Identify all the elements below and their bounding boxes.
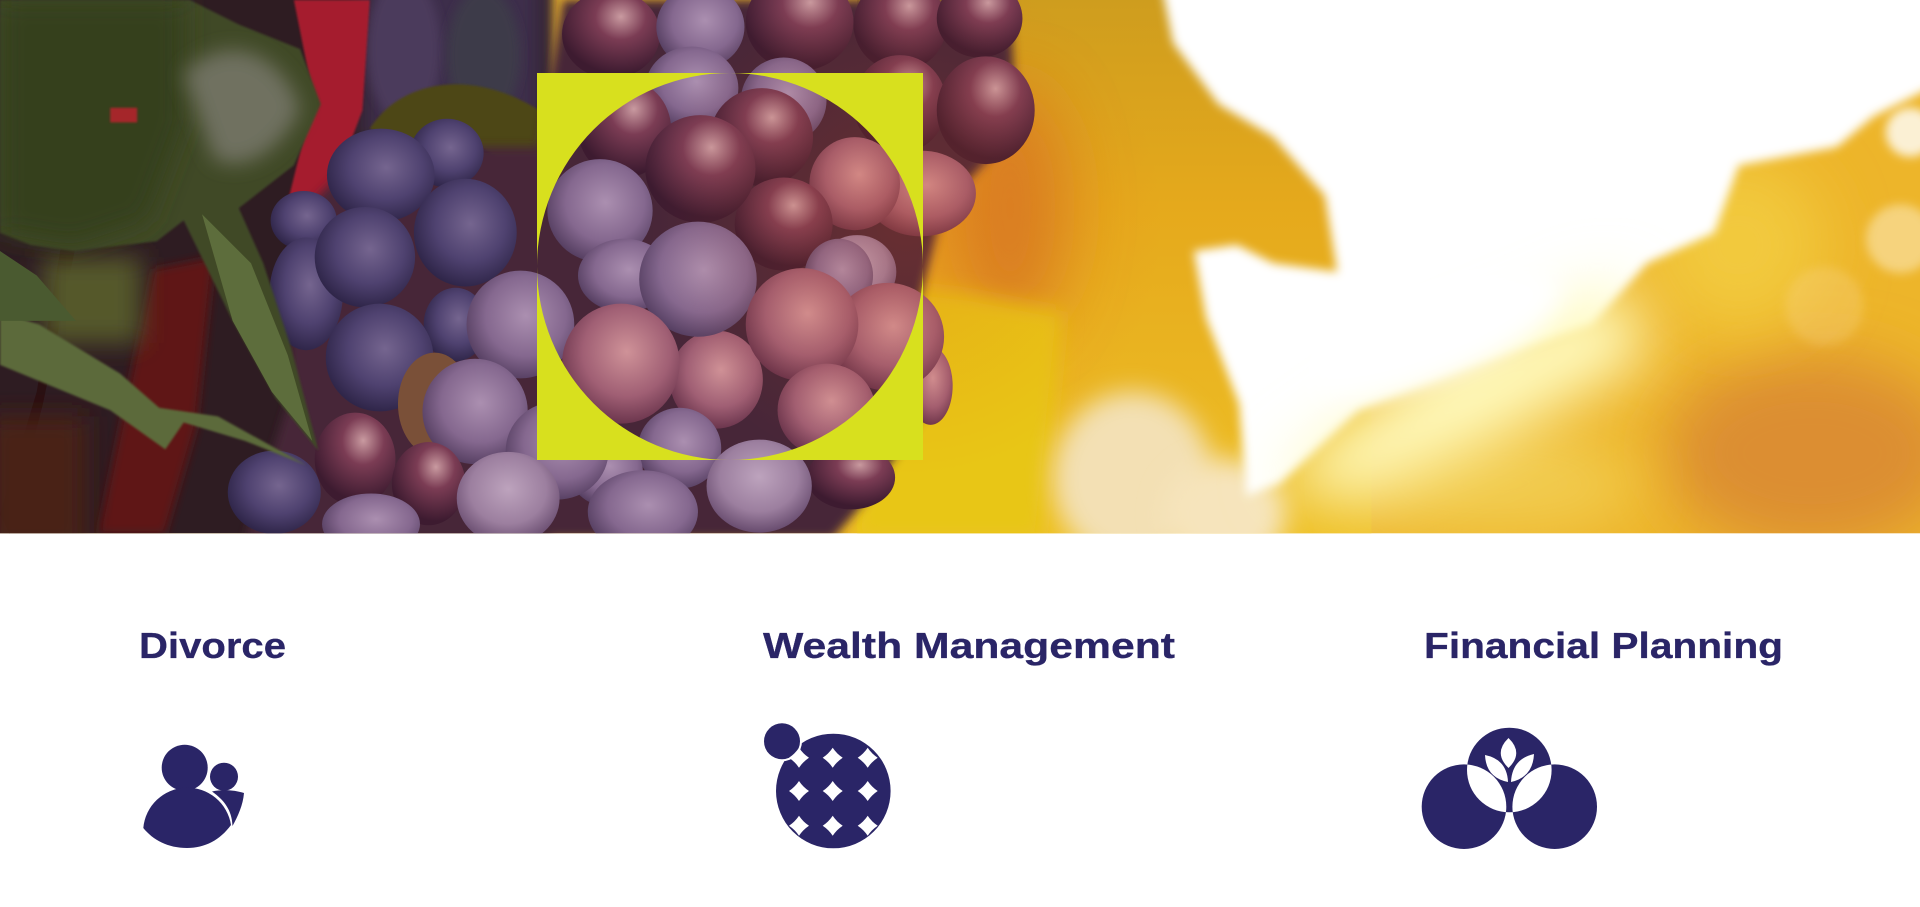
bright core of the sun — [1351, 282, 1563, 412]
heading: Wealth Management: Wealth Management — [763, 625, 1175, 666]
section: Wealth Management — [762, 625, 1175, 848]
sunlit golden background — [0, 0, 1920, 588]
icon: three circles with plant — [1422, 728, 1597, 849]
section: Financial Planning — [1422, 625, 1783, 849]
section: Divorce — [139, 625, 286, 848]
heading: Financial Planning: Financial Planning — [1424, 625, 1783, 666]
curled leaf behind grapes — [370, 83, 537, 151]
sunlight tint — [706, 25, 1048, 396]
sun flare — [1273, 282, 1653, 502]
heading: Divorce: Divorce — [139, 625, 286, 666]
grape cluster — [228, 0, 1035, 555]
icon: two people — [143, 745, 244, 848]
lime square with circular cutout — [537, 73, 923, 460]
icon: coin with diamonds — [762, 721, 891, 848]
dark vine background — [0, 0, 551, 563]
bokeh lights — [1785, 108, 1920, 345]
sky glare — [1157, 0, 1920, 496]
vine leaves — [0, 0, 321, 465]
photo banner: grapes in sunlight — [0, 0, 1920, 588]
